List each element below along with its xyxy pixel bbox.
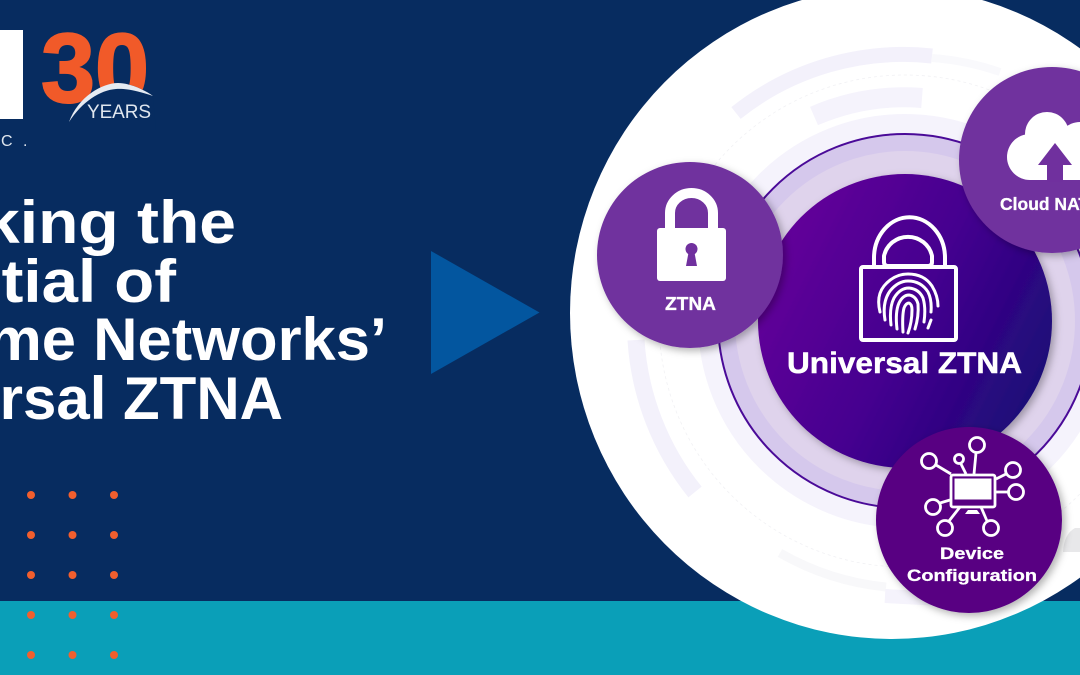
logo: company fragment: C . [1, 133, 30, 150]
decorative rings [636, 54, 1080, 600]
logo: YEARS label: YEARS [87, 102, 151, 123]
logo: 30 numerals: 30 [41, 13, 149, 123]
title [0, 190, 387, 432]
label: ZTNA: ZTNA [665, 294, 716, 314]
panel: Cloud NAT node [959, 67, 1080, 253]
panel: Device Configuration node [876, 427, 1062, 613]
outer ring [718, 134, 1080, 508]
arrow: play triangle [431, 251, 540, 374]
panel: ZTNA node [597, 162, 783, 348]
label: Device Configuration: Configuration [907, 566, 1037, 585]
icon: fingerprint padlock [861, 217, 956, 340]
icon: networked monitor [922, 438, 1024, 536]
logo: numeral mask [69, 83, 156, 130]
icon: cloud upload [1007, 112, 1080, 182]
panel: Universal ZTNA hub [758, 174, 1052, 468]
logo [0, 13, 156, 150]
white diagram disc [570, 0, 1080, 639]
logo: white swoosh [69, 83, 153, 122]
logo: white block [0, 30, 23, 119]
dot grid [27, 491, 118, 659]
label: Universal ZTNA: Universal ZTNA [787, 347, 1022, 380]
teal footer band [0, 601, 1080, 675]
label: Device Configuration [907, 544, 1037, 585]
icon: padlock [657, 193, 726, 281]
icon: fingerprint [879, 274, 938, 333]
label: Device Configuration: Device [940, 544, 1004, 563]
